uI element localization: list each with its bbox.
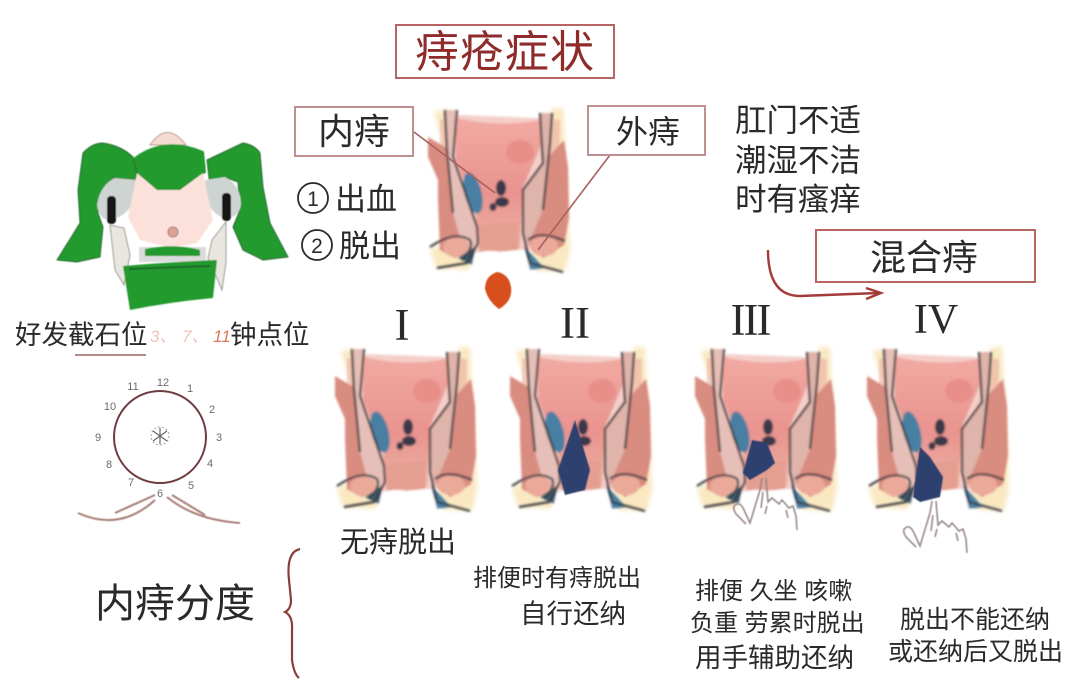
caption: common positions: 7、 bbox=[182, 327, 208, 346]
symptoms of internal hemorrhoids: 1 bbox=[307, 188, 319, 211]
grade II: 自行还纳 bbox=[520, 599, 626, 629]
grade II: 排便时有痔脱出 bbox=[473, 565, 641, 592]
panel: lithotomy position bbox=[15, 132, 310, 523]
panel: internal hemorrhoid label bbox=[295, 107, 413, 156]
clock position diagram: 6 bbox=[157, 488, 163, 500]
grading heading: 内痔分度 bbox=[95, 582, 255, 626]
grade I: I bbox=[394, 300, 410, 350]
external hemorrhoid label: 外痔 bbox=[616, 114, 680, 150]
title: 痔疮症状 bbox=[415, 28, 595, 77]
external hemorrhoid symptoms: 潮湿不洁 bbox=[735, 142, 861, 178]
clock position diagram: 12 bbox=[157, 377, 169, 389]
external hemorrhoid symptoms: 时有瘙痒 bbox=[735, 181, 861, 217]
grade III: 负重 劳累时脱出 bbox=[690, 610, 865, 637]
clock position diagram bbox=[78, 377, 240, 523]
clock position diagram: 8 bbox=[106, 459, 112, 471]
clock position diagram: 7 bbox=[128, 477, 134, 489]
symptoms of internal hemorrhoids bbox=[298, 182, 401, 264]
anatomy diagram with bleeding bbox=[414, 108, 610, 309]
clock position diagram: 9 bbox=[95, 432, 101, 444]
grade III: 排便 久坐 咳嗽 bbox=[695, 578, 852, 605]
clock position diagram: 11 bbox=[127, 381, 139, 393]
external hemorrhoid label bbox=[588, 106, 705, 155]
caption: common positions: 11 bbox=[213, 327, 231, 346]
clock position diagram: 5 bbox=[188, 480, 194, 492]
grade III bbox=[690, 295, 865, 673]
grade II: II bbox=[560, 298, 590, 348]
clock position diagram: 1 bbox=[187, 383, 193, 395]
grade I: 无痔脱出 bbox=[340, 526, 456, 559]
grade IV bbox=[867, 297, 1063, 666]
caption: common positions bbox=[15, 320, 310, 355]
grade IV: 脱出不能还纳 bbox=[900, 606, 1050, 634]
panel: internal hemorrhoid label: 内痔 bbox=[318, 111, 390, 152]
grade I bbox=[335, 300, 477, 559]
symptoms of internal hemorrhoids: 2 bbox=[311, 235, 323, 258]
clock position diagram: 10 bbox=[104, 401, 116, 413]
clock position diagram: 4 bbox=[207, 458, 213, 470]
grade II bbox=[473, 298, 652, 629]
clock position diagram: 2 bbox=[209, 404, 215, 416]
external hemorrhoid symptoms bbox=[735, 102, 861, 217]
brace bbox=[285, 549, 300, 678]
symptoms of internal hemorrhoids: 出血 bbox=[335, 182, 397, 217]
illustration: patient in lithotomy position bbox=[57, 132, 288, 310]
caption: common positions: 3、 bbox=[150, 327, 176, 346]
grade III: III bbox=[731, 295, 770, 345]
mixed hemorrhoid label: 混合痔 bbox=[870, 237, 978, 278]
grade IV: IV bbox=[914, 297, 958, 343]
caption: common positions: 好发截石位 bbox=[15, 320, 148, 350]
symptoms of internal hemorrhoids: 脱出 bbox=[339, 229, 401, 264]
caption: common positions: 钟点位 bbox=[230, 320, 310, 350]
clock position diagram: 3 bbox=[216, 432, 222, 444]
grade III: 用手辅助还纳 bbox=[695, 643, 854, 673]
external hemorrhoid symptoms: 肛门不适 bbox=[735, 102, 861, 138]
mixed hemorrhoid label bbox=[816, 230, 1035, 282]
arrow to mixed hemorrhoid bbox=[768, 250, 881, 299]
grade IV: 或还纳后又脱出 bbox=[888, 638, 1063, 666]
